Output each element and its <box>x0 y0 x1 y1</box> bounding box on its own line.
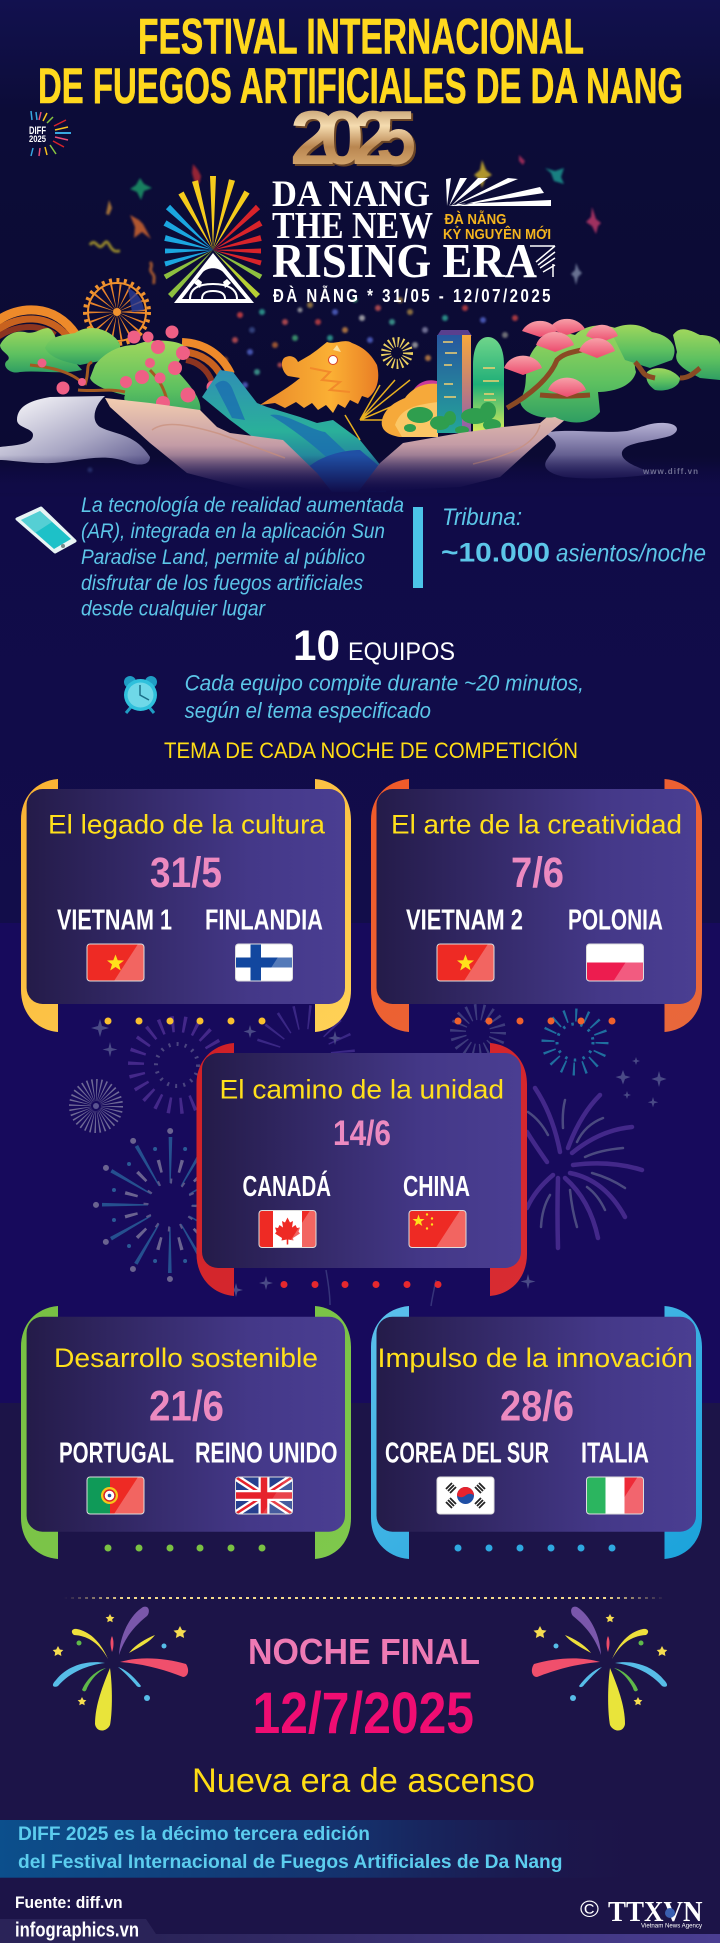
TTXVN logo: Vietnam News Agency <box>641 1922 703 1930</box>
date: 14/6 <box>333 1114 391 1153</box>
theme: Impulso de la innovación <box>378 1343 693 1373</box>
purple arc burst <box>527 1088 642 1248</box>
teams: COREA DEL SUR <box>385 1438 549 1470</box>
theme: El legado de la cultura <box>48 810 326 840</box>
right pine tree <box>520 325 720 422</box>
TTXVN logo: © <box>580 1896 599 1922</box>
TTXVN logo: TTXVN <box>608 1896 703 1928</box>
confetti <box>88 155 601 472</box>
AR text: La tecnología de realidad aumentada <box>81 494 404 517</box>
watermark: www.diff.vn <box>642 467 698 476</box>
2025 gold numerals: 2 <box>354 98 396 183</box>
2025 gold numerals: 5 <box>376 96 416 181</box>
final night block: 12/7/2025 <box>252 1681 474 1746</box>
source: infographics.vn <box>15 1920 139 1942</box>
source <box>15 1893 139 1942</box>
flag: Poland <box>586 944 644 981</box>
icon: DIFF logo: DIFF <box>29 125 46 137</box>
dots <box>280 1281 442 1288</box>
white fan stripes <box>446 178 555 277</box>
seating stat: ~10.000 <box>441 538 550 568</box>
teams <box>406 904 663 936</box>
orange clouds <box>382 380 440 437</box>
title <box>38 8 683 114</box>
panel: 14/6 <box>196 1043 527 1296</box>
firecracker rays <box>345 380 412 440</box>
cloud right <box>545 423 677 478</box>
rainbow arcs <box>0 310 231 382</box>
footer strip <box>0 1919 720 1943</box>
flag: Finland <box>236 944 292 981</box>
teams text: Cada equipo compite durante ~20 minutos, <box>185 671 584 696</box>
icon: firework left <box>53 1607 188 1731</box>
dots <box>454 1544 616 1552</box>
left branches <box>30 362 170 420</box>
teams: POLONIA <box>568 904 663 936</box>
stars <box>91 1019 667 1297</box>
teams: FINLANDIA <box>205 904 323 936</box>
pink flowers left <box>38 326 220 410</box>
purple burst <box>136 1024 218 1106</box>
blue burst <box>96 1131 244 1279</box>
towers <box>437 330 504 433</box>
theme: El camino de la unidad <box>220 1075 504 1105</box>
flag: Portugal <box>87 1477 144 1514</box>
divider bar <box>413 507 423 588</box>
dots <box>104 1544 266 1552</box>
festival logo <box>164 174 555 306</box>
teams text: según el tema especificado <box>185 698 431 723</box>
icon: triangle with bridge <box>174 253 254 303</box>
note band: del Festival Internacional de Fuegos Artificiales de Da Nang <box>18 1852 562 1873</box>
logo text: ĐÀ NẴNG * 31/05 - 12/07/2025 <box>273 285 553 306</box>
panel: 31/5 <box>21 779 351 1032</box>
final night block: NOCHE FINAL <box>248 1631 480 1672</box>
2025 gold numerals: 0 <box>320 96 364 181</box>
seating stat: Tribuna: <box>442 504 522 531</box>
hands <box>105 397 588 492</box>
illustration: hands with landscape <box>0 280 720 493</box>
logo text <box>272 174 553 306</box>
flag: Vietnam <box>87 944 144 981</box>
trunk and branches <box>507 348 700 408</box>
AR text: desde cualquier lugar <box>81 598 266 621</box>
icon: firework right <box>532 1607 667 1731</box>
logo text: ĐÀ NẴNG <box>444 211 506 228</box>
teams: ITALIA <box>581 1438 649 1470</box>
teams heading: EQUIPOS <box>348 638 455 666</box>
2025 gold numerals: 2 <box>352 96 394 181</box>
teams: VIETNAM 1 <box>57 904 172 936</box>
date: 28/6 <box>500 1383 574 1431</box>
panel: 28/6 <box>371 1306 702 1559</box>
theme: El arte de la creatividad <box>391 810 682 840</box>
seating stat <box>441 504 706 568</box>
2025 gold numerals: 2 <box>292 98 338 183</box>
flag: South Korea <box>437 1477 494 1514</box>
teams heading <box>293 622 455 670</box>
cloud left <box>0 396 150 465</box>
teams: VIETNAM 2 <box>406 904 523 936</box>
2025 gold numerals <box>290 96 418 183</box>
seating stat: asientos/noche <box>556 540 706 568</box>
teams: REINO UNIDO <box>195 1438 338 1470</box>
flag: Canada <box>259 1210 316 1248</box>
icon: DIFF logo: 2025 <box>29 134 46 144</box>
date: 21/6 <box>149 1383 224 1431</box>
teal burst <box>548 1015 602 1069</box>
left pine tree <box>0 328 200 422</box>
dragon <box>260 341 378 413</box>
dots <box>104 1018 266 1024</box>
source: Fuente: diff.vn <box>15 1893 123 1912</box>
teams <box>59 1438 338 1470</box>
small trees <box>404 402 501 434</box>
AR text: (AR), integrada en la aplicación Sun <box>81 520 385 543</box>
2025 gold numerals: 5 <box>378 98 418 183</box>
logo text: KỶ NGUYÊN MỚI <box>443 225 551 243</box>
ferris wheel <box>85 280 149 344</box>
illustration bottom fade <box>0 455 720 493</box>
icon: firework burst <box>164 176 262 298</box>
dots <box>454 1018 616 1024</box>
2025 gold numerals: 0 <box>322 98 366 183</box>
theme: Desarrollo sostenible <box>54 1343 318 1373</box>
AR info block <box>17 494 404 621</box>
teams <box>57 904 323 936</box>
date: 31/5 <box>150 849 222 897</box>
teams heading: 10 <box>293 622 340 670</box>
teams: PORTUGAL <box>59 1438 174 1470</box>
logo text: THE NEW <box>272 205 433 247</box>
teams: CHINA <box>403 1171 470 1203</box>
flag: Italy <box>586 1477 644 1514</box>
flag: United Kingdom <box>236 1477 292 1514</box>
date: 7/6 <box>511 849 564 897</box>
grey burst <box>80 1090 112 1122</box>
pink fans <box>504 319 618 397</box>
AR text: Paradise Land, permite al público <box>81 546 365 569</box>
final night block <box>192 1631 535 1800</box>
AR text <box>81 494 404 621</box>
note band <box>0 1820 660 1878</box>
2025 gold numerals: 2 <box>290 96 336 181</box>
icon: phone <box>17 508 75 552</box>
panel: 21/6 <box>21 1306 351 1559</box>
small firework <box>386 342 408 364</box>
teams text <box>185 671 584 723</box>
mountains <box>202 370 386 492</box>
panel: 7/6 <box>371 779 702 1032</box>
flag: China <box>409 1210 466 1248</box>
flag: Vietnam <box>437 944 494 981</box>
section heading: TEMA DE CADA NOCHE DE COMPETICIÓN <box>164 738 578 763</box>
background fireworks <box>80 1012 667 1306</box>
logo text: DA NANG <box>272 174 430 215</box>
center bursts <box>267 1012 498 1306</box>
teams <box>242 1169 470 1203</box>
icon: alarm clock <box>124 676 157 713</box>
teams: CANADÁ <box>242 1169 331 1203</box>
note band: DIFF 2025 es la décimo tercera edición <box>18 1824 370 1845</box>
AR text: disfrutar de los fuegos artificiales <box>81 572 363 595</box>
final night block: Nueva era de ascenso <box>192 1762 535 1800</box>
logo text: RISING ERA <box>272 233 538 288</box>
icon: DIFF logo <box>29 111 71 156</box>
